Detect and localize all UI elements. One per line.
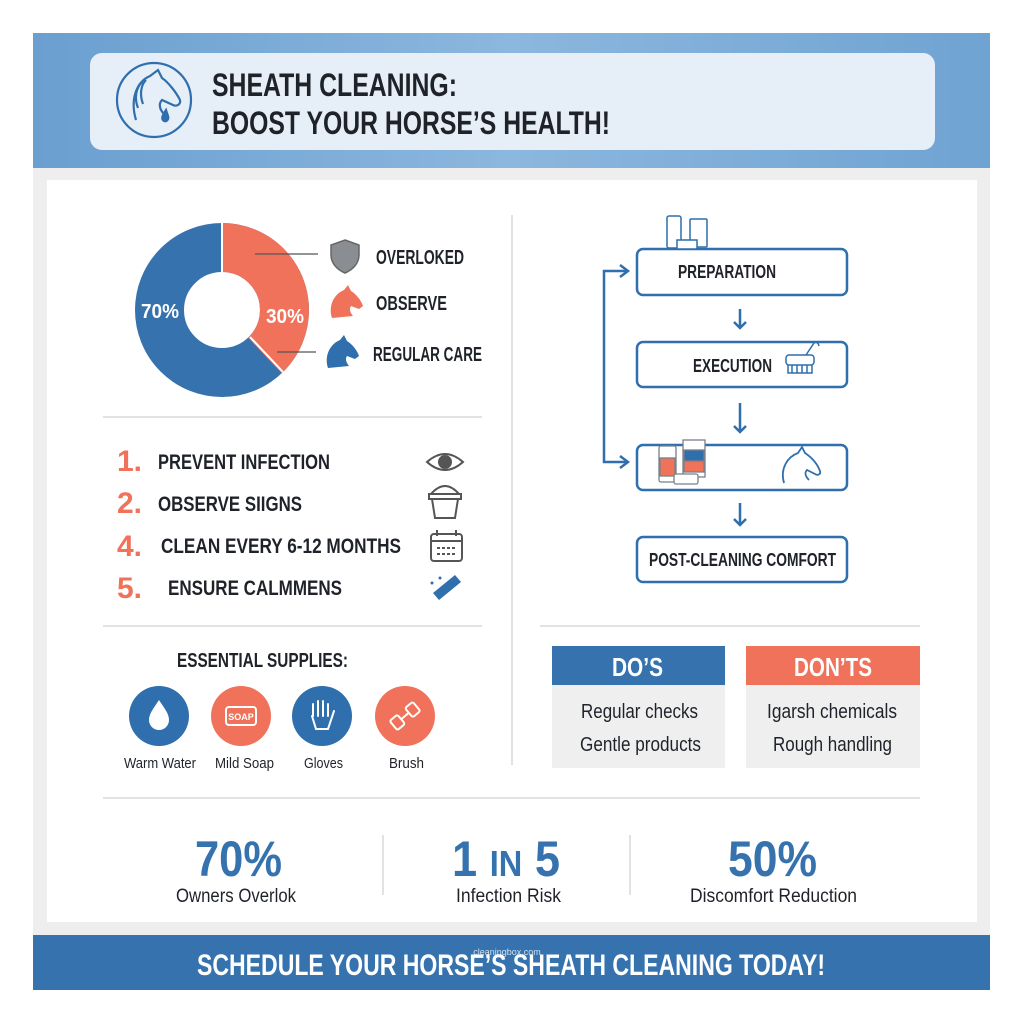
icon: bucket	[429, 486, 461, 518]
essential supplies: Gloves	[304, 755, 343, 772]
stats: Discomfort Reduction	[690, 886, 857, 907]
donut chart: 70%	[141, 301, 179, 323]
legend	[327, 240, 482, 368]
body background	[33, 168, 990, 935]
flowchart: PREPARATION	[678, 262, 776, 282]
do's panel: Gentle products	[580, 734, 701, 756]
stats: Infection Risk	[456, 886, 561, 907]
stats: Owners Overlok	[176, 886, 296, 907]
title	[212, 67, 610, 141]
icon: execution brush	[786, 342, 819, 373]
don'ts panel: Rough handling	[773, 734, 892, 756]
icon: mild soap: SOAP	[228, 712, 254, 722]
icon: shield	[331, 240, 359, 273]
icon: gloves	[292, 686, 352, 746]
title: SHEATH CLEANING:	[212, 67, 457, 103]
icon: warm water	[129, 686, 189, 746]
numbered list: 1.	[117, 445, 142, 478]
title panel	[90, 53, 935, 150]
essential supplies: Brush	[389, 755, 424, 772]
icon: horse outline	[783, 447, 820, 483]
icon: supplies top	[667, 216, 707, 249]
icon: brush	[375, 686, 435, 746]
icon: horse logo	[117, 63, 191, 137]
do's panel	[552, 646, 725, 768]
donut chart	[141, 223, 318, 372]
icon: mild soap	[211, 686, 271, 746]
do's panel: Regular checks	[581, 701, 698, 723]
numbered list: CLEAN EVERY 6-12 MONTHS	[161, 535, 401, 558]
flowchart	[604, 216, 847, 582]
essential supplies: ESSENTIAL SUPPLIES:	[177, 650, 348, 672]
stats: 70%	[195, 831, 282, 887]
legend: REGULAR CARE	[373, 344, 482, 366]
flowchart: EXECUTION	[693, 356, 772, 376]
icon: horse blue	[327, 335, 359, 368]
legend: OVERLOKED	[376, 247, 464, 269]
icon: supplies colored	[659, 440, 705, 484]
title: BOOST YOUR HORSE’S HEALTH!	[212, 105, 610, 141]
icon: eye	[427, 454, 463, 470]
header band	[33, 33, 990, 168]
icon: horse orange	[331, 285, 363, 318]
donut chart: 30%	[266, 306, 304, 328]
don'ts panel: Igarsh chemicals	[767, 701, 897, 723]
essential supplies	[124, 650, 435, 772]
don'ts panel: DON’TS	[794, 652, 872, 682]
numbered list	[117, 445, 463, 605]
numbered list: PREVENT INFECTION	[158, 451, 330, 474]
footer banner: cleaningbox.com	[473, 947, 541, 957]
numbered list: ENSURE CALMMENS	[168, 577, 342, 600]
essential supplies: Warm Water	[124, 755, 196, 772]
don'ts panel	[746, 646, 920, 768]
do's panel: DO’S	[612, 652, 663, 682]
essential supplies: Mild Soap	[215, 755, 274, 772]
stats: 1 IN 5	[452, 831, 560, 887]
legend: OBSERVE	[376, 293, 447, 315]
footer banner: SCHEDULE YOUR HORSE’S SHEATH CLEANING TODAY!	[197, 949, 825, 982]
numbered list: 4.	[117, 530, 142, 563]
numbered list: OBSERVE SIIGNS	[158, 493, 302, 516]
footer banner	[33, 935, 990, 990]
main card	[47, 180, 977, 922]
icon: calendar	[431, 530, 462, 561]
icon: brush blue	[430, 575, 461, 600]
flowchart: POST-CLEANING COMFORT	[649, 550, 836, 570]
numbered list: 2.	[117, 487, 142, 520]
numbered list: 5.	[117, 572, 142, 605]
stats: 50%	[728, 831, 817, 887]
stats	[176, 831, 857, 907]
